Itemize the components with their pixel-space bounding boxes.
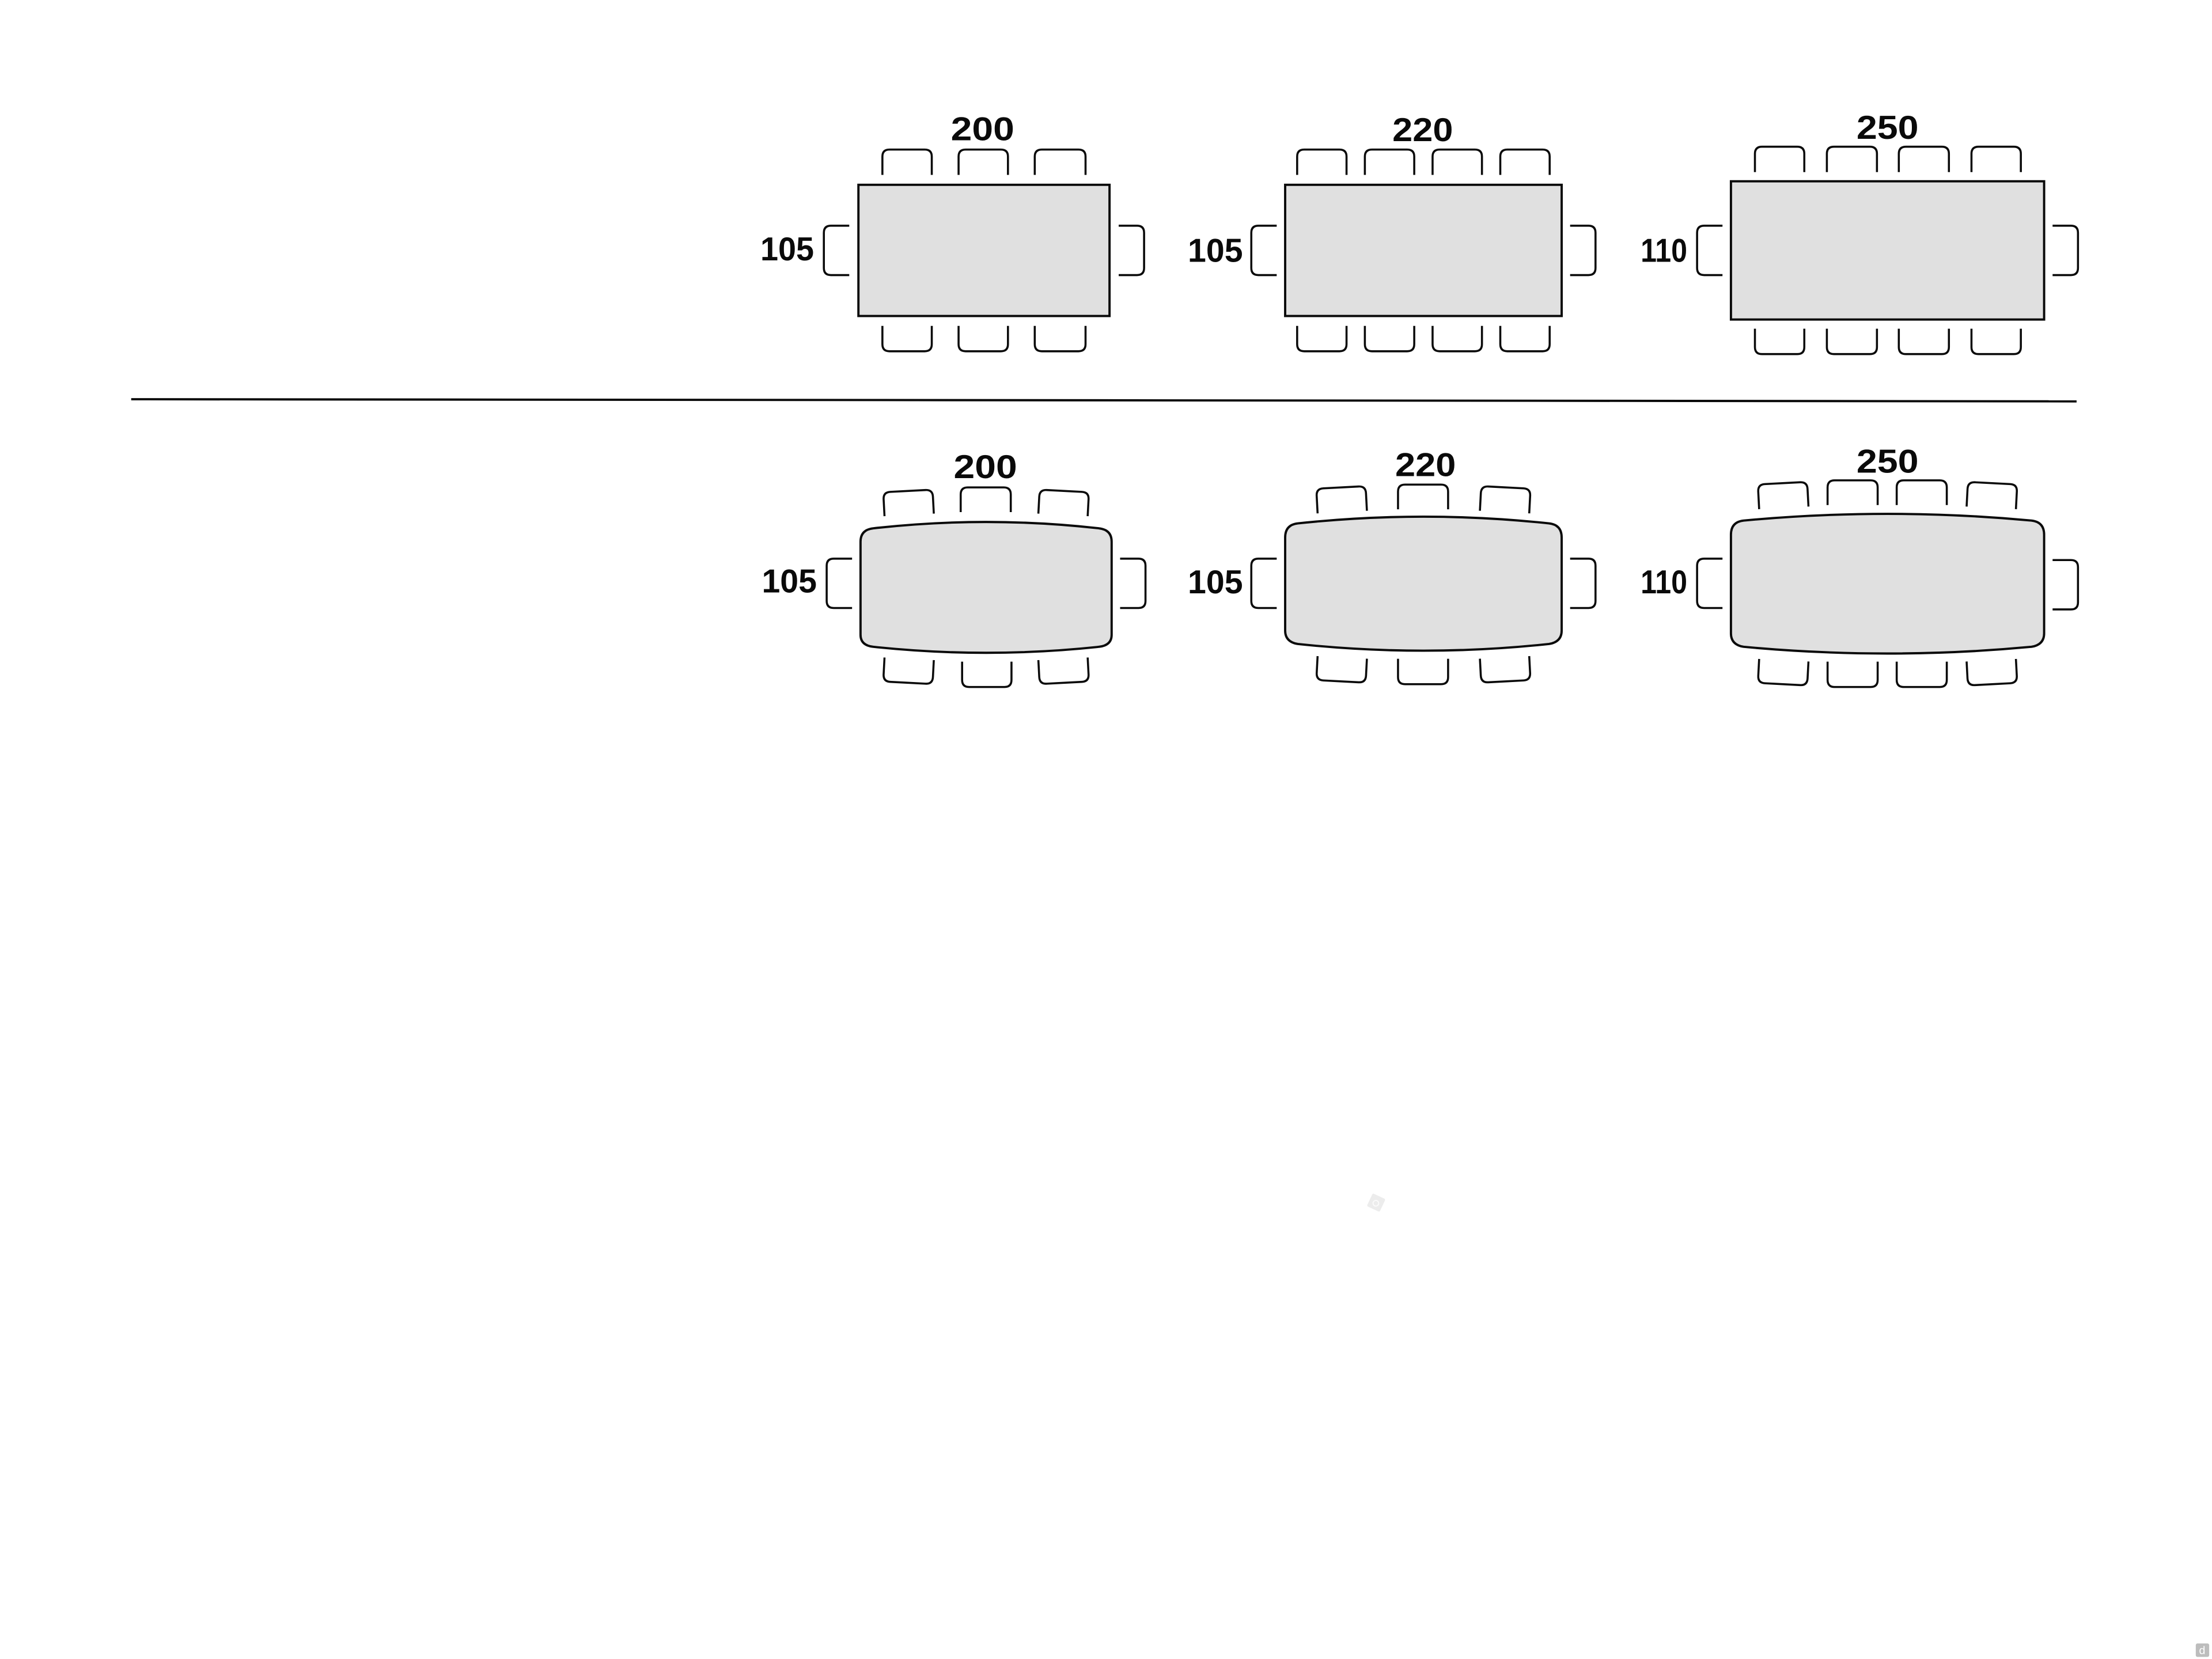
depth label: 105 [1188, 232, 1243, 269]
chairs [1697, 480, 2078, 687]
table diagram: barrel 200x105 [762, 449, 1146, 687]
chairs [827, 487, 1146, 687]
table top [1285, 517, 1562, 651]
table diagram: rectangular 220x105 [1188, 112, 1596, 351]
width label: 220 [1395, 447, 1456, 484]
corner badge [2196, 1643, 2209, 1657]
table diagram: barrel 220x105 [1188, 447, 1596, 684]
width label: 200 [954, 449, 1017, 486]
corner badge: d [2199, 1645, 2205, 1657]
width label: 250 [1857, 443, 1919, 480]
table top [1731, 181, 2044, 320]
watermark icon [1367, 1193, 1385, 1212]
chairs [1251, 484, 1596, 684]
chairs [1251, 150, 1596, 351]
table top [858, 185, 1109, 316]
table top [1731, 514, 2044, 653]
chairs [1697, 147, 2078, 354]
width label: 250 [1857, 109, 1919, 146]
table diagram: rectangular 200x105 [760, 111, 1144, 351]
table top [1285, 185, 1562, 316]
width label: 200 [951, 111, 1014, 148]
chairs [824, 150, 1144, 351]
depth label: 110 [1641, 232, 1687, 269]
depth label: 105 [760, 231, 814, 268]
width label: 220 [1392, 112, 1453, 149]
depth label: 110 [1641, 564, 1687, 601]
table diagram: rectangular 250x110 [1641, 109, 2078, 354]
table top [861, 522, 1112, 653]
depth label: 105 [1188, 564, 1243, 601]
divider line [131, 399, 2077, 402]
depth label: 105 [762, 563, 817, 600]
table diagram: barrel 250x110 [1641, 443, 2078, 687]
